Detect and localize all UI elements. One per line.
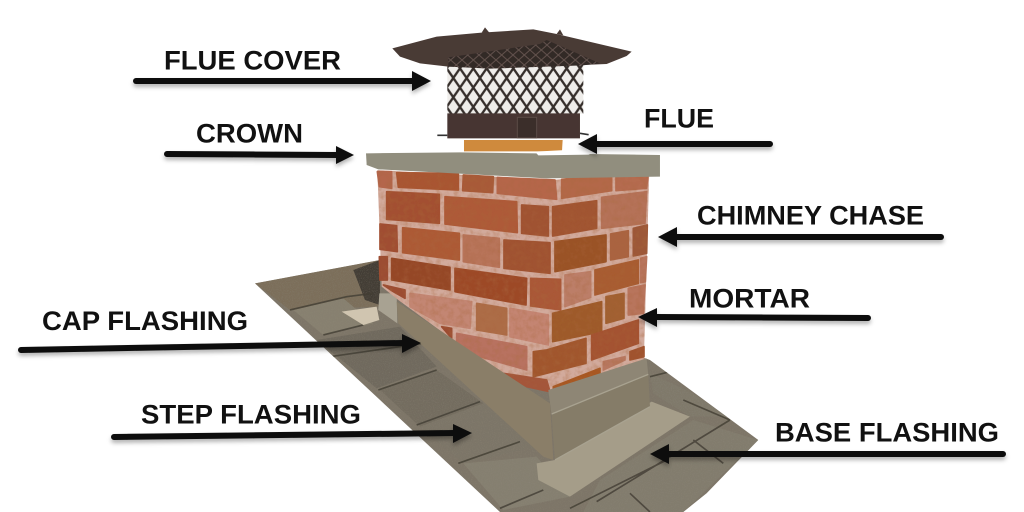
step flashing small plate [342, 307, 379, 325]
panel: brick chimney chase [376, 170, 650, 392]
flashing crease [552, 374, 650, 460]
arrow: base flashing [650, 444, 1003, 464]
arrow: crown [167, 146, 354, 164]
label: flue: FLUE [644, 104, 714, 134]
wire mesh [447, 65, 583, 114]
roof surface [250, 260, 770, 512]
arrow: flue [578, 134, 770, 154]
base flashing lower [552, 375, 650, 460]
labels and arrows [21, 46, 1003, 464]
label: mortar: MORTAR [689, 284, 810, 314]
label: step flashing: STEP FLASHING [141, 400, 361, 430]
arrow: chimney chase [658, 227, 941, 247]
arrow: step flashing [114, 424, 472, 443]
bricks: left face [377, 172, 561, 392]
base flashing upper [548, 358, 648, 415]
brick mottling [378, 170, 649, 387]
crown white top [535, 149, 590, 155]
label: crown: CROWN [196, 118, 303, 148]
step flashing upright [378, 293, 397, 323]
label: cap flashing: CAP FLASHING [42, 306, 248, 336]
metal band [437, 113, 589, 138]
base flashing plate [537, 402, 690, 497]
label: base flashing: BASE FLASHING [775, 418, 999, 448]
label: flue cover: FLUE COVER [164, 46, 341, 76]
panel: metal flashing [397, 302, 650, 460]
hood [392, 27, 632, 69]
cap flashing left face [397, 302, 553, 460]
arrow: cap flashing [21, 334, 421, 353]
arrow: mortar [638, 308, 868, 327]
mortar background [377, 170, 649, 393]
label: chimney chase: CHIMNEY CHASE [697, 200, 924, 230]
flue pipe [464, 140, 563, 151]
crown cap [366, 152, 660, 178]
bricks: right face [533, 172, 648, 390]
panel: flue cover and crown [366, 27, 660, 178]
panel: roof with shingles [250, 260, 770, 512]
arrow: flue cover [136, 71, 431, 91]
